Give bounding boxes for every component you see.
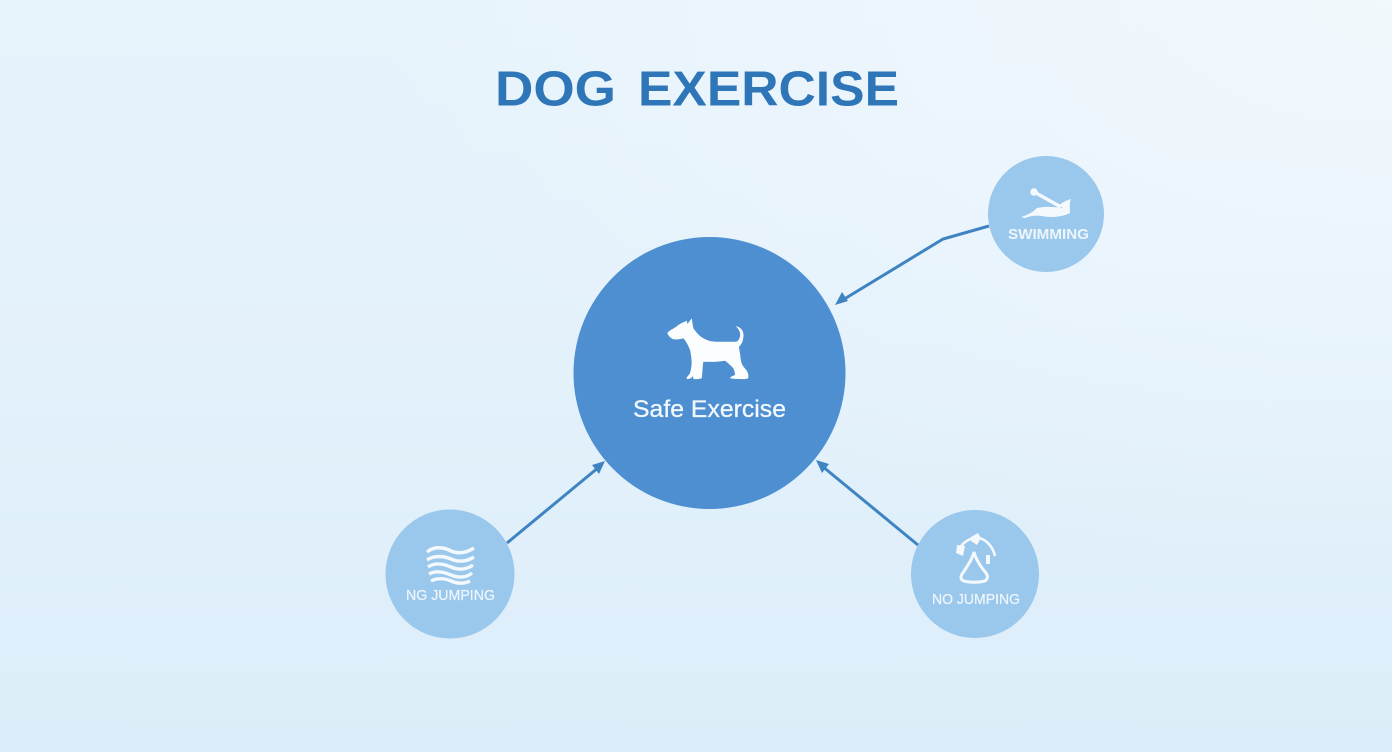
arrow: swimming to safe exercise: [835, 226, 989, 305]
arrow: left no jumping to safe exercise: [507, 461, 605, 543]
icon: circular arrows over triangle: [956, 533, 995, 582]
label: no jumping: NO JUMPING: [932, 591, 1020, 608]
title: DOG: [495, 62, 616, 116]
node: right no jumping: [911, 510, 1039, 638]
node: swimming: [988, 156, 1104, 272]
label: swimming: SWIMMING: [1008, 226, 1089, 243]
icon: water waves: [427, 548, 474, 583]
label: safe exercise: Safe Exercise: [633, 396, 786, 423]
icon: swimming figure: [1021, 188, 1071, 218]
title: [495, 62, 899, 116]
title: EXERCISE: [638, 62, 899, 116]
icon: dog: [667, 318, 748, 379]
arrow: right no jumping to safe exercise: [816, 460, 918, 545]
central node: safe exercise: [574, 237, 846, 509]
label: ng jumping: NG JUMPING: [406, 587, 495, 604]
node: left no jumping: [386, 510, 514, 638]
